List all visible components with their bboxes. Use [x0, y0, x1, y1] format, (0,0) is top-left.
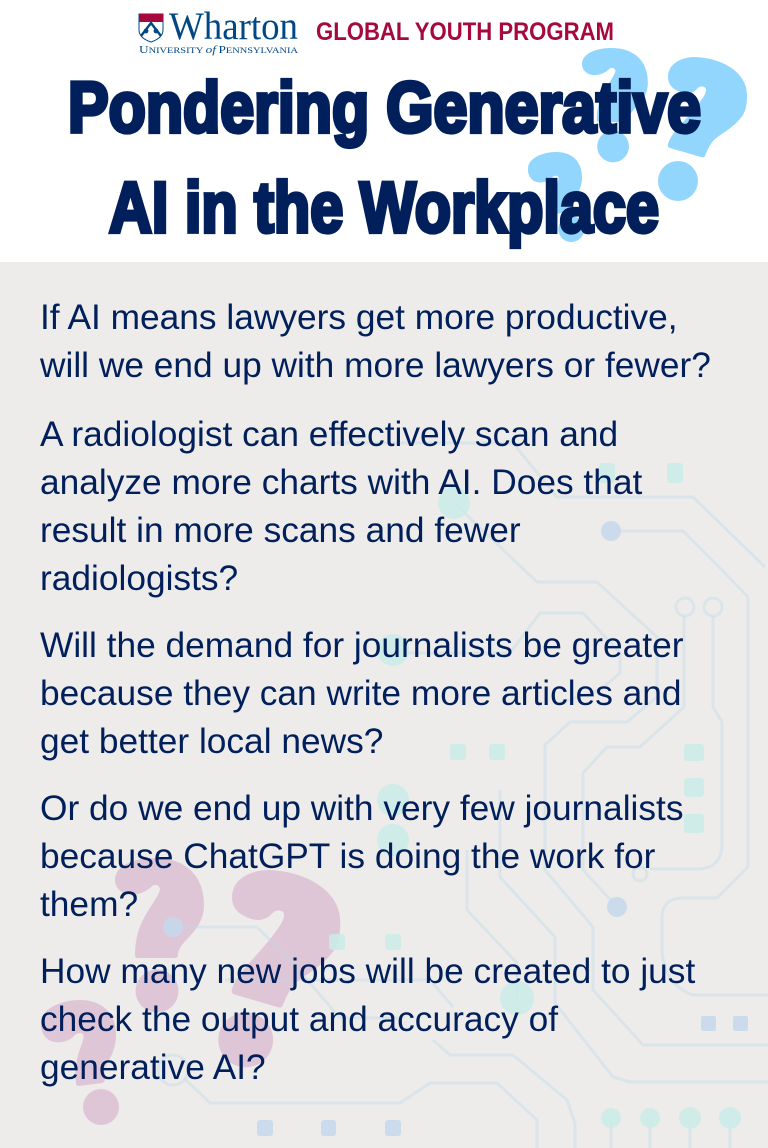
question text: new jobs: check the output and accuracy of — [40, 1000, 558, 1039]
title — [68, 69, 701, 248]
circuit board background pattern — [158, 443, 768, 1148]
question text: radiologists: radiologists? — [40, 559, 238, 598]
question text: fewer journalists: because ChatGPT is doing the work for — [40, 837, 656, 876]
question text: lawyers: If AI means lawyers get more productive, — [40, 298, 678, 337]
logo subline: UNIVERSITY of PENNSYLVANIA — [139, 44, 299, 56]
question text: new jobs: How many new jobs will be created to just — [40, 952, 695, 991]
question text: journalists demand: because they can write more articles and — [40, 674, 682, 713]
question text: radiologists: A radiologist can effectively scan and — [40, 415, 618, 454]
icon: pink question marks — [41, 858, 340, 1125]
question text: new jobs: generative AI? — [40, 1048, 266, 1087]
question text: fewer journalists: Or do we end up with very few journalists — [40, 789, 683, 828]
body panel background — [0, 262, 768, 1148]
title: AI in the Workplace — [109, 169, 659, 248]
question text: lawyers: will we end up with more lawyers or fewer? — [39, 346, 711, 385]
question text: new jobs — [40, 952, 695, 1087]
question text: journalists demand: Will the demand for journalists be greater — [40, 626, 684, 665]
question text: fewer journalists — [40, 789, 683, 924]
header background — [0, 0, 768, 262]
icon: Penn shield — [139, 14, 163, 42]
question text: radiologists — [40, 415, 642, 598]
logo wordmark: Wharton — [169, 5, 298, 48]
question text: fewer journalists: them? — [40, 885, 138, 924]
question text: radiologists: analyze more charts with AI. Does that — [40, 463, 642, 502]
question text: radiologists: result in more scans and fewer — [40, 511, 521, 550]
question text: lawyers — [39, 298, 711, 385]
program label: GLOBAL YOUTH PROGRAM — [316, 18, 614, 46]
icon: blue question marks — [528, 48, 747, 242]
logo: Wharton University of Pennsylvania — [139, 5, 299, 56]
question text: journalists demand: get better local news? — [40, 722, 383, 761]
question text: journalists demand — [40, 626, 684, 761]
